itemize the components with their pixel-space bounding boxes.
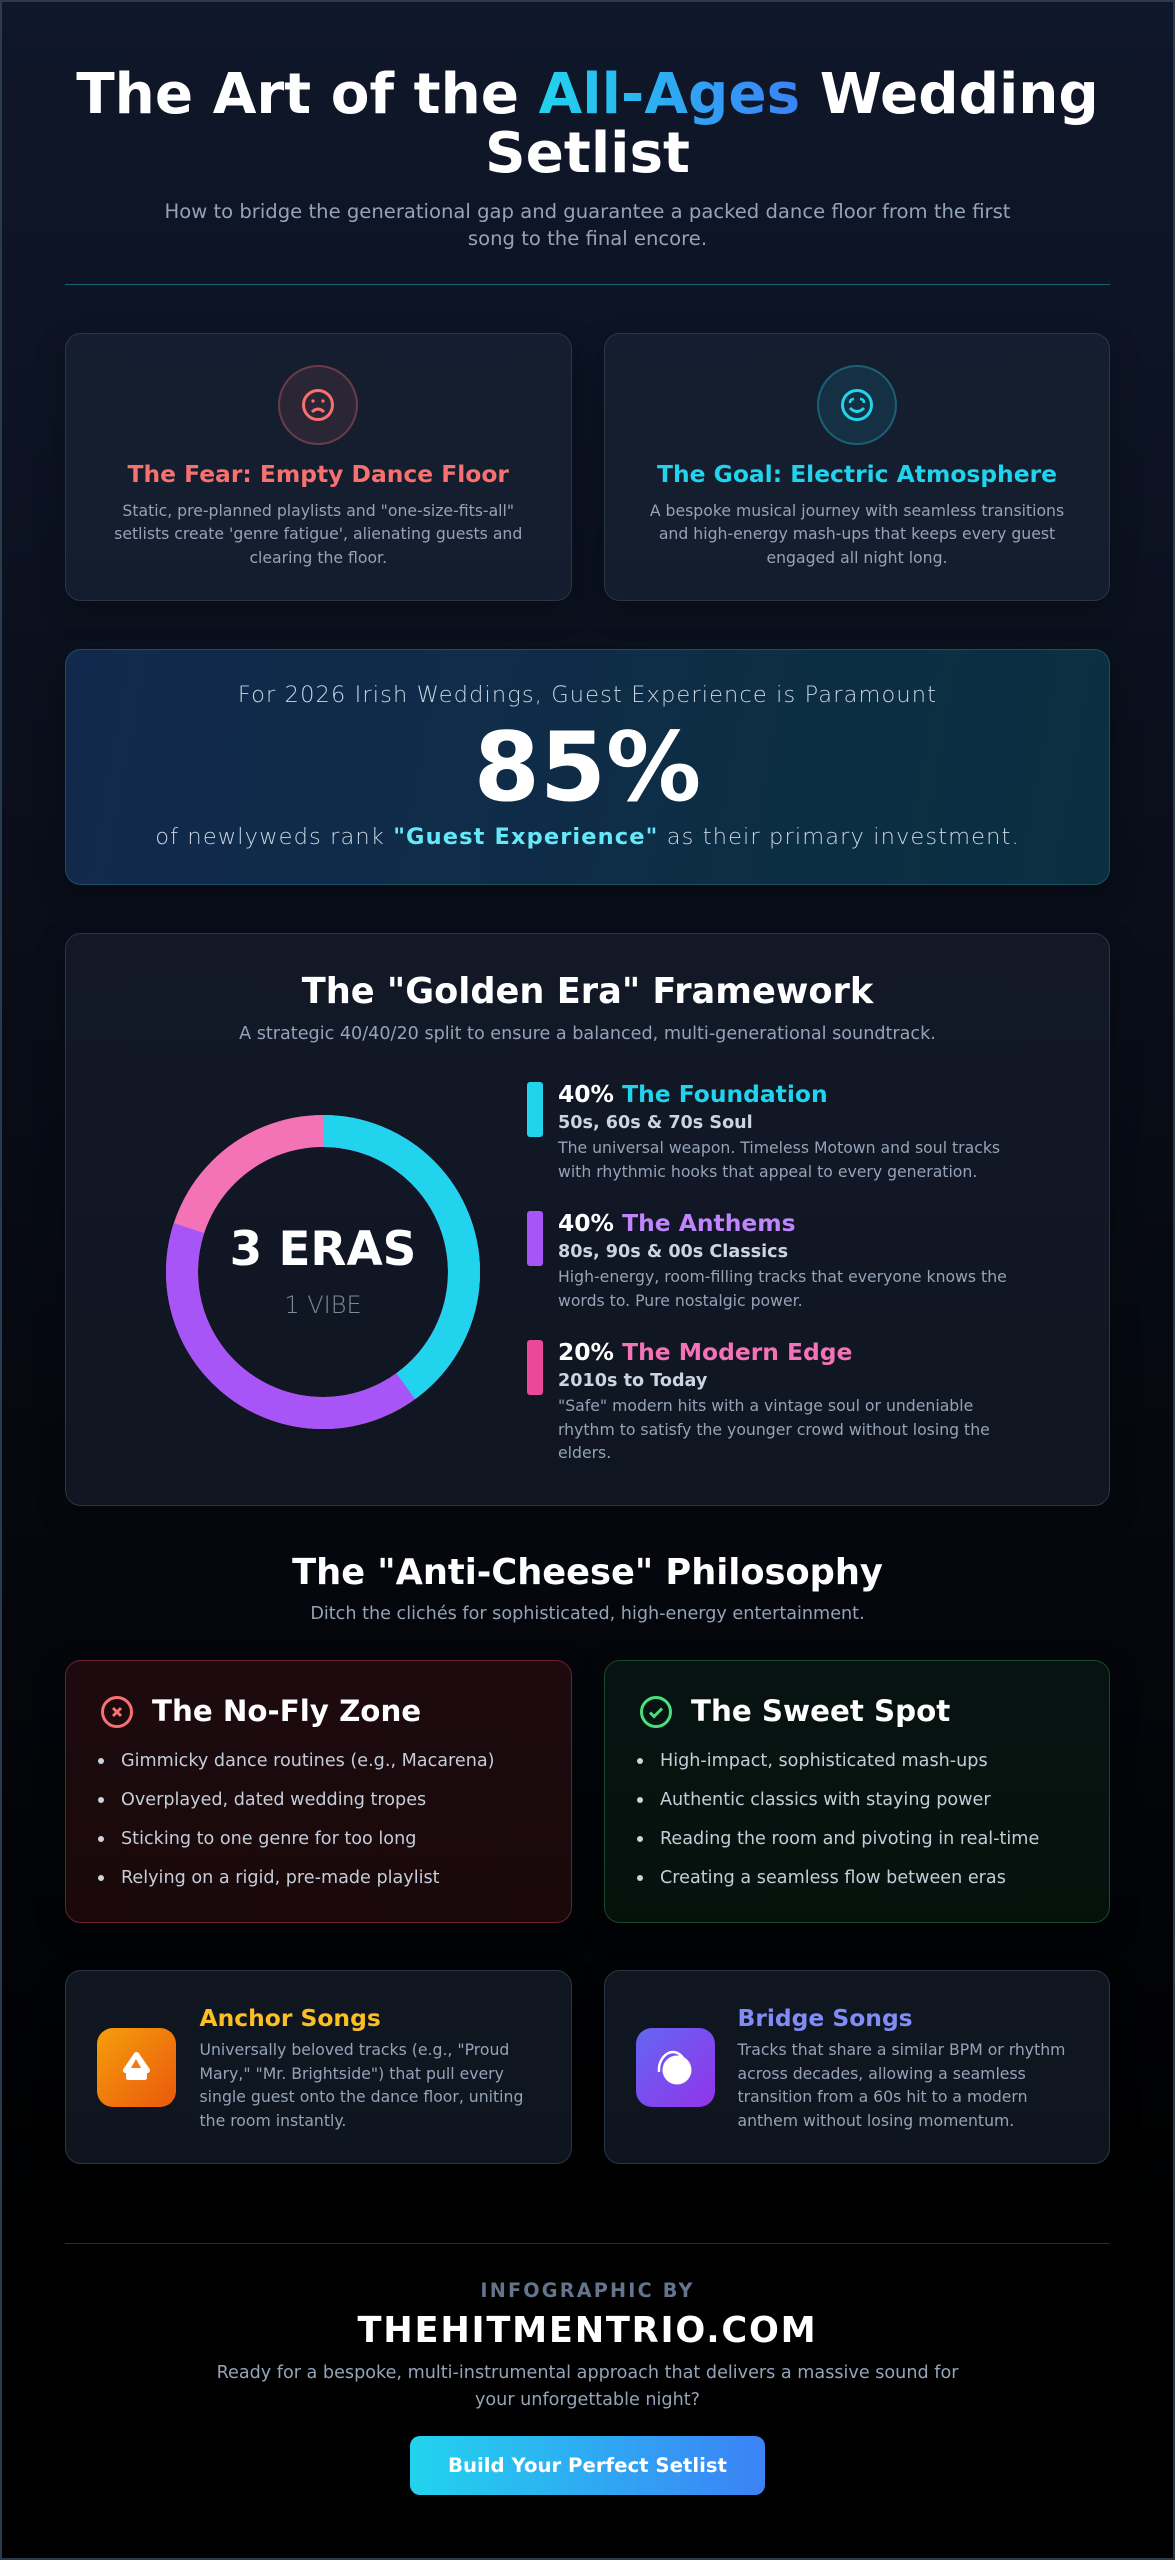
- icon: anchor: [97, 2028, 176, 2107]
- goal description: engaged all night long.: [766, 548, 948, 567]
- legend: the anthems: High-energy, room-filling tracks that everyone knows the: [558, 1267, 1007, 1286]
- legend: the foundation: 40% The Foundation: [558, 1080, 828, 1108]
- no-fly list: [98, 1751, 495, 1888]
- panel: the fear: [65, 333, 572, 601]
- anchor songs description: [200, 2040, 523, 2130]
- sweet spot list: High-impact, sophisticated mash-ups: [660, 1751, 988, 1771]
- no-fly list: Sticking to one genre for too long: [121, 1829, 416, 1849]
- legend: the modern edge: [527, 1338, 990, 1462]
- icon: sad face: [278, 365, 358, 445]
- anchor songs heading: Anchor Songs: [200, 2004, 381, 2032]
- panel: anchor songs: [65, 1970, 572, 2164]
- call to action button: [410, 2436, 765, 2495]
- legend: the modern edge: 2010s to Today: [558, 1371, 707, 1391]
- donut centre caption: 1 VIBE: [284, 1291, 362, 1319]
- panel: golden era framework: [65, 933, 1110, 1506]
- no-fly list: Gimmicky dance routines (e.g., Macarena): [121, 1751, 495, 1771]
- no-fly heading: The No-Fly Zone: [152, 1694, 421, 1728]
- goal description: A bespoke musical journey with seamless transitions: [650, 501, 1064, 520]
- fear heading: The Fear: Empty Dance Floor: [128, 460, 509, 488]
- header: [65, 62, 1110, 285]
- fear description: Static, pre-planned playlists and "one-size-fits-all": [122, 501, 514, 520]
- panel: no-fly zone: [65, 1660, 572, 1923]
- goal heading: The Goal: Electric Atmosphere: [657, 460, 1057, 488]
- legend: the anthems: 40% The Anthems: [558, 1209, 796, 1237]
- philosophy title: The "Anti-Cheese" Philosophy: [292, 1552, 883, 1593]
- bridge songs description: across decades, allowing a seamless: [738, 2064, 1026, 2082]
- anchor songs description: Universally beloved tracks (e.g., "Proud: [200, 2040, 509, 2059]
- call to action button: Build Your Perfect Setlist: [448, 2454, 727, 2477]
- legend: the modern edge: 20% The Modern Edge: [558, 1338, 852, 1366]
- footer text: [217, 2363, 958, 2410]
- fear description: setlists create 'genre fatigue', alienating guests and: [114, 524, 522, 543]
- no-fly list: Relying on a rigid, pre-made playlist: [121, 1868, 440, 1888]
- banner heading: For 2026 Irish Weddings, Guest Experience is Paramount: [238, 682, 937, 708]
- legend: the anthems: [527, 1209, 1007, 1310]
- sweet spot heading: The Sweet Spot: [691, 1694, 950, 1728]
- icon: bridge: [636, 2028, 714, 2107]
- footer text: Ready for a bespoke, multi-instrumental approach that delivers a massive sound for: [217, 2363, 958, 2383]
- framework heading: The "Golden Era" Framework: [302, 971, 873, 1012]
- footer: [65, 2243, 1110, 2495]
- bridge songs heading: Bridge Songs: [738, 2004, 913, 2032]
- anchor songs description: Mary," "Mr. Brightside") that pull every: [200, 2064, 504, 2082]
- panel: sweet spot: [604, 1660, 1110, 1923]
- panel: bridge songs: [604, 1970, 1110, 2164]
- philosophy subtitle: Ditch the clichés for sophisticated, high-energy entertainment.: [310, 1604, 865, 1624]
- anchor songs description: single guest onto the dance floor, uniting: [200, 2087, 523, 2106]
- legend: the foundation: The universal weapon. Timeless Motown and soul tracks: [558, 1138, 1000, 1157]
- title: Setlist: [485, 121, 690, 186]
- donut centre value: 3 ERAS: [230, 1223, 416, 1277]
- fear description: clearing the floor.: [249, 548, 387, 567]
- banner caption: of newlyweds rank "Guest Experience" as their primary investment.: [155, 824, 1020, 850]
- legend: the foundation: [527, 1080, 1000, 1181]
- sweet spot list: Authentic classics with staying power: [660, 1790, 991, 1810]
- goal description: [650, 501, 1064, 567]
- panel: statistic banner: [65, 649, 1110, 885]
- subtitle: song to the final encore.: [468, 227, 707, 250]
- goal description: and high-energy mash-ups that keeps every guest: [659, 524, 1055, 543]
- title: The Art of the All-Ages Wedding: [76, 62, 1099, 127]
- legend: the foundation: with rhythmic hooks that appeal to every generation.: [558, 1162, 977, 1181]
- footer brand: THEHITMENTRIO.COM: [358, 2310, 817, 2351]
- legend: the anthems: words to. Pure nostalgic power.: [558, 1291, 803, 1310]
- subtitle: How to bridge the generational gap and guarantee a packed dance floor from the first: [164, 200, 1010, 223]
- framework subtitle: A strategic 40/40/20 split to ensure a balanced, multi-generational soundtrack.: [239, 1024, 936, 1044]
- sweet spot list: Creating a seamless flow between eras: [660, 1868, 1006, 1888]
- big statistic: 85%: 85%: [474, 713, 701, 823]
- legend: the modern edge: elders.: [558, 1443, 611, 1462]
- legend: the foundation: 50s, 60s & 70s Soul: [558, 1113, 753, 1133]
- sweet spot list: [637, 1751, 1039, 1888]
- footer text: your unforgettable night?: [475, 2390, 700, 2410]
- panel: the goal: [604, 333, 1110, 601]
- icon: check circle: [640, 1696, 672, 1728]
- legend: the modern edge: rhythm to satisfy the younger crowd without losing the: [558, 1420, 990, 1439]
- no-fly list: Overplayed, dated wedding tropes: [121, 1790, 426, 1810]
- anchor songs description: the room instantly.: [200, 2110, 346, 2130]
- legend: the modern edge: "Safe" modern hits with a vintage soul or undeniable: [558, 1396, 973, 1415]
- donut chart: [166, 1115, 480, 1429]
- subtitle: [164, 200, 1010, 250]
- legend: the anthems: 80s, 90s & 00s Classics: [558, 1242, 788, 1262]
- bridge songs description: [737, 2040, 1065, 2130]
- bridge songs description: transition from a 60s hit to a modern: [738, 2087, 1028, 2106]
- fear description: [114, 501, 522, 567]
- sweet spot list: Reading the room and pivoting in real-time: [660, 1829, 1039, 1849]
- bridge songs description: anthem without losing momentum.: [738, 2110, 1014, 2130]
- footer label: INFOGRAPHIC BY: [480, 2279, 695, 2302]
- bridge songs description: Tracks that share a similar BPM or rhythm: [738, 2040, 1065, 2059]
- icon: cross circle: [101, 1696, 133, 1728]
- title: [76, 62, 1099, 186]
- icon: happy face: [817, 365, 897, 445]
- divider: [65, 284, 1110, 285]
- section heading: anti-cheese philosophy: [292, 1552, 883, 1624]
